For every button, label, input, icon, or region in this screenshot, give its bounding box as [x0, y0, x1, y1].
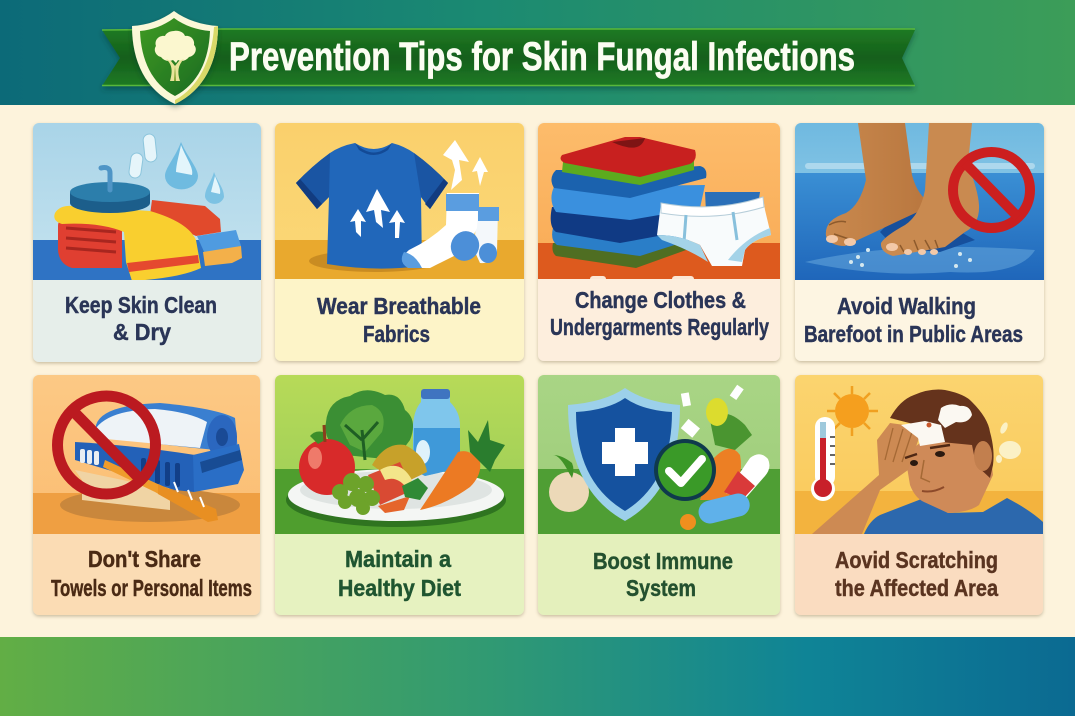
label — [835, 547, 998, 601]
illustration: stacked clothes and briefs — [538, 123, 780, 282]
label: System — [626, 575, 696, 601]
label: Avoid Walking — [837, 293, 976, 319]
card — [33, 375, 260, 615]
illustration: t-shirt and socks — [275, 123, 524, 279]
label: Aovid Scratching — [835, 547, 998, 573]
footer band — [0, 637, 1075, 716]
label — [51, 546, 252, 601]
icon: no sign — [953, 152, 1030, 228]
panel: avoid walking barefoot — [795, 123, 1044, 361]
label: Maintain a — [345, 546, 451, 572]
header band — [0, 0, 1075, 105]
card — [795, 123, 1044, 361]
panel: change clothes and undergarments — [538, 123, 780, 361]
title: Prevention Tips for Skin Fungal Infections — [229, 35, 855, 79]
card — [795, 375, 1043, 615]
label — [593, 548, 733, 601]
label — [804, 293, 1023, 347]
card — [538, 375, 780, 615]
illustration: bare feet on wet floor with no sign — [795, 123, 1044, 280]
card — [538, 123, 780, 361]
label: Barefoot in Public Areas — [804, 321, 1023, 347]
label: Undergarments Regularly — [550, 314, 769, 340]
icon: no sign — [58, 396, 156, 494]
ribbon — [102, 29, 915, 86]
card — [33, 123, 261, 362]
illustration: man touching forehead, sun and thermometer — [795, 375, 1043, 534]
illustration: towels, sink and drops — [33, 123, 261, 281]
card — [275, 375, 524, 615]
panel: do not share towels — [33, 375, 260, 615]
panel: avoid scratching — [795, 375, 1043, 615]
label: Keep Skin Clean — [65, 292, 217, 318]
panel: maintain a healthy diet — [275, 375, 524, 615]
label: the Affected Area — [835, 575, 998, 601]
label: Towels or Personal Items — [51, 575, 252, 601]
icon: shield with tree — [132, 11, 218, 104]
label: Healthy Diet — [338, 575, 461, 601]
label: Change Clothes & — [575, 287, 746, 313]
label: Don't Share — [88, 546, 201, 572]
card — [275, 123, 524, 361]
label — [317, 293, 481, 347]
label — [65, 292, 217, 345]
label — [338, 546, 461, 601]
panel: wear breathable fabrics — [275, 123, 524, 361]
panel: keep skin clean and dry — [33, 123, 261, 362]
label — [550, 287, 769, 340]
illustration: shield, pills and vegetables — [538, 375, 780, 534]
label: Fabrics — [363, 321, 430, 347]
title banner — [102, 11, 915, 104]
label: Boost Immune — [593, 548, 733, 574]
panel: boost immune system — [538, 375, 780, 615]
illustration: towel, rack and brush — [33, 375, 260, 534]
label: Wear Breathable — [317, 293, 481, 319]
illustration: plate of healthy food — [275, 375, 524, 534]
label: & Dry — [113, 319, 171, 345]
